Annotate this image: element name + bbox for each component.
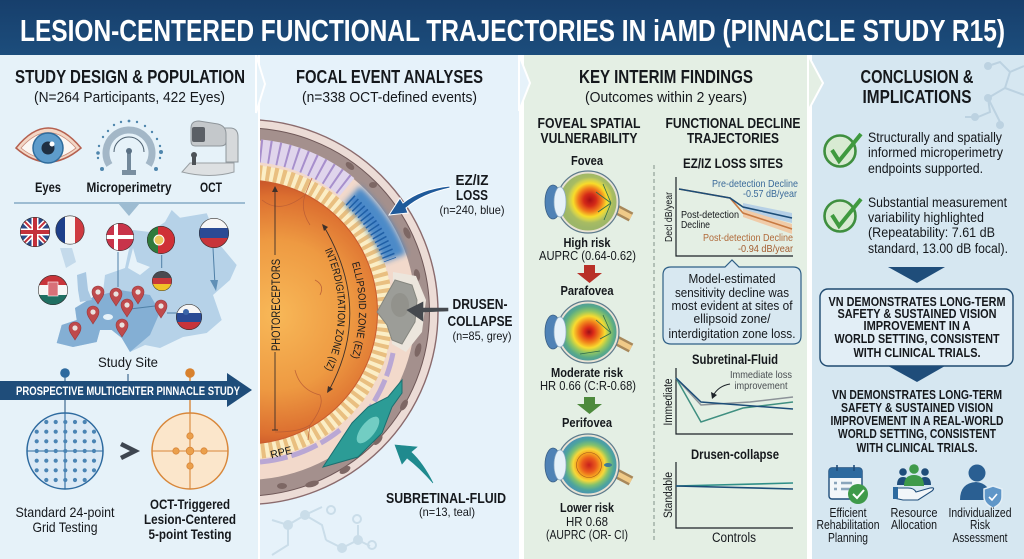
caption: lesion-centered testing bbox=[144, 496, 236, 542]
caption: risk assessment bbox=[948, 506, 1012, 545]
caption: rehabilitation planning: Efficient bbox=[830, 506, 867, 520]
line chart: EZ/IZ bbox=[663, 177, 798, 256]
subheading: foveal: FOVEAL SPATIAL bbox=[538, 116, 641, 132]
text: measurement variability: variability highlighted bbox=[868, 210, 984, 225]
heading: focal events bbox=[296, 67, 483, 106]
heading: study design: STUDY DESIGN & POPULATION bbox=[15, 67, 245, 87]
callout: model-estimated decline bbox=[663, 260, 801, 344]
chart: standard 24-point grid bbox=[27, 413, 103, 489]
arrow: down two bbox=[888, 366, 945, 382]
arrow: down red bbox=[577, 265, 602, 283]
flag: Slovenia bbox=[176, 304, 202, 330]
caption: resource allocation: Allocation bbox=[891, 518, 937, 532]
heading: key findings bbox=[579, 67, 753, 106]
risk: lower: (AUPRC (OR- CI) bbox=[546, 528, 628, 542]
text: measurement variability bbox=[868, 195, 1008, 256]
callout: VN demonstrates: WITH CLINICAL TRIALS. bbox=[854, 346, 980, 360]
EZ/IZ loss region bbox=[350, 195, 395, 260]
caption: resource allocation: Resource bbox=[890, 506, 938, 520]
arrow: down one bbox=[888, 267, 945, 283]
panel: study design and population bbox=[0, 67, 252, 542]
icon labels: OCT bbox=[200, 180, 223, 195]
icon labels: Microperimetry bbox=[86, 180, 172, 195]
line chart: EZ/IZ: -0.94 dB/year bbox=[738, 243, 793, 255]
text: measurement variability: Substantial measurement bbox=[868, 195, 1007, 210]
callout: model-estimated decline: Model-estimated bbox=[688, 272, 776, 286]
label: subretinal fluid: (n=13, teal) bbox=[419, 505, 475, 519]
line chart: EZ/IZ: Post-detection Decline bbox=[703, 232, 793, 244]
chart heading: EZ/IZ loss sites: EZ/IZ LOSS SITES bbox=[683, 155, 783, 171]
heading: focal events: FOCAL EVENT ANALYSES bbox=[296, 67, 483, 87]
risk: moderate: HR 0.66 (C:R-0.68) bbox=[540, 379, 636, 393]
arrow: EZ/IZ bbox=[389, 186, 450, 215]
caption: risk assessment: Assessment bbox=[952, 531, 1008, 545]
eye heatmap: parafovea bbox=[545, 301, 631, 363]
column: functional decline trajectories bbox=[663, 116, 801, 545]
chart: lesion-centered 5-point test bbox=[152, 413, 228, 489]
icon: risk assessment person with shield bbox=[960, 464, 1002, 508]
line chart: EZ/IZ: Decline bbox=[681, 219, 710, 231]
retinal vessels bbox=[262, 178, 322, 440]
heading: key findings: (Outcomes within 2 years) bbox=[585, 90, 747, 106]
callout: VN demonstrates: WORLD SETTING, CONSISTENT bbox=[834, 332, 1000, 346]
label: drusen collapse: (n=85, grey) bbox=[452, 329, 512, 343]
curved zone labels bbox=[322, 224, 366, 393]
subheading: functional decline: TRAJECTORIES bbox=[687, 131, 779, 147]
risk: moderate: Moderate risk bbox=[551, 365, 624, 380]
icon labels: Eyes bbox=[35, 180, 61, 195]
line chart: drusen collapse bbox=[663, 462, 793, 545]
greater-than symbol bbox=[121, 444, 135, 458]
sclera outer rim bbox=[260, 119, 439, 505]
text: measurement variability: standard, 13.00 dB focal). bbox=[868, 241, 1008, 256]
map of Europe with study sites bbox=[57, 210, 237, 352]
flag: Portugal bbox=[147, 226, 175, 254]
risk: moderate bbox=[540, 365, 636, 393]
line chart: subretinal fluid bbox=[663, 368, 793, 434]
diagram: retina cross-section bbox=[260, 119, 439, 505]
risk: high bbox=[539, 235, 636, 263]
callout: model-estimated decline: ellipsoid zone/ bbox=[694, 312, 771, 326]
drusen collapse deposit bbox=[377, 272, 426, 352]
caption: risk assessment: Individualized bbox=[948, 506, 1012, 520]
heading: conclusion: CONCLUSION & bbox=[860, 67, 974, 87]
line chart: EZ/IZ: -0.57 dB/year bbox=[743, 188, 797, 200]
line chart: EZ/IZ: Pre-detection Decline bbox=[712, 178, 798, 190]
title banner bbox=[0, 0, 1024, 55]
label: perifovea: Perifovea bbox=[562, 415, 613, 430]
icon: check two bbox=[824, 199, 861, 232]
icon: microperimetry bbox=[96, 120, 163, 175]
panel: focal event analyses bbox=[260, 67, 513, 556]
heading: study design bbox=[15, 67, 245, 106]
callout: model-estimated decline: sensitivity decline was bbox=[675, 286, 789, 300]
label: fovea: Fovea bbox=[571, 153, 604, 168]
icon: rehabilitation calendar bbox=[829, 465, 868, 504]
panel: conclusion and implications bbox=[816, 62, 1024, 545]
RPE label: RPE bbox=[269, 445, 293, 462]
heading: conclusion: IMPLICATIONS bbox=[862, 87, 972, 107]
timeline arrow banner bbox=[0, 368, 252, 430]
caption: lesion-centered testing: Lesion-Centered bbox=[144, 511, 236, 527]
flag: Denmark bbox=[106, 223, 134, 251]
flag: United Kingdom bbox=[20, 217, 50, 247]
callout: VN demonstrates: SAFETY & SUSTAINED VISION bbox=[838, 307, 996, 321]
label: drusen collapse bbox=[448, 297, 513, 343]
flag: Germany bbox=[152, 271, 172, 291]
photoreceptors axis label bbox=[272, 186, 280, 430]
caption: rehabilitation planning: Rehabilitation bbox=[816, 518, 880, 532]
icon: check one bbox=[824, 134, 861, 166]
text: VN demonstrates real-world: SAFETY & SUSTAINED VISION bbox=[841, 401, 993, 415]
text: measurement variability: (Repeatability: 7.61 dB bbox=[868, 225, 995, 240]
icon: eye bbox=[16, 128, 81, 163]
risk: high: High risk bbox=[564, 235, 611, 250]
line chart: EZ/IZ: Post-detection bbox=[681, 209, 739, 221]
line chart: subretinal fluid: improvement bbox=[734, 380, 788, 392]
pale subretinal band bbox=[260, 140, 412, 480]
text: endpoints supported bbox=[868, 130, 1003, 176]
photoreceptor outer segments bbox=[260, 151, 393, 462]
label: EZ/IZ loss bbox=[440, 173, 504, 217]
line chart: subretinal fluid: Immediate bbox=[663, 378, 675, 426]
subheading: foveal: VULNERABILITY bbox=[540, 131, 638, 147]
callout: model-estimated decline: most evident at sites of bbox=[672, 299, 793, 313]
chart heading: drusen collapse: Drusen-collapse bbox=[691, 447, 779, 462]
label: EZ/IZ loss: LOSS bbox=[456, 188, 488, 204]
arrow: down green bbox=[577, 397, 602, 414]
orange retina bbox=[260, 180, 378, 444]
callout: VN demonstrates bbox=[820, 289, 1013, 366]
flag: Russia bbox=[199, 218, 229, 248]
caption: standard testing bbox=[16, 504, 115, 535]
chart heading: subretinal fluid: Subretinal-Fluid bbox=[692, 352, 778, 367]
caption: lesion-centered testing: 5-point Testing bbox=[148, 526, 232, 542]
label: subretinal fluid: SUBRETINAL-FLUID bbox=[386, 491, 506, 507]
decorative molecule bbox=[965, 62, 1024, 128]
arrow: drusen bbox=[407, 302, 448, 321]
text: endpoints supported: informed microperimetry bbox=[868, 145, 1003, 160]
heading: study design: (N=264 Participants, 422 Eyes) bbox=[34, 90, 225, 106]
curved zone labels: ELLIPSOID ZONE (EZ) bbox=[350, 262, 366, 358]
caption: risk assessment: Risk bbox=[970, 518, 991, 532]
panel: key interim findings bbox=[538, 67, 801, 545]
label: drusen collapse: DRUSEN- bbox=[452, 297, 508, 313]
caption: standard testing: Grid Testing bbox=[32, 519, 98, 535]
photoreceptors axis label: PHOTORECEPTORS bbox=[271, 259, 283, 351]
map label: study site: Study Site bbox=[98, 354, 158, 370]
curved zone labels: INTERDIGITATION ZONE (IZ) bbox=[324, 248, 346, 371]
line chart: EZ/IZ: Decl dB/year bbox=[663, 192, 675, 242]
icon: resource allocation bbox=[893, 464, 934, 500]
icon labels bbox=[35, 180, 223, 195]
choroid layer bbox=[260, 128, 430, 496]
caption: rehabilitation planning: Planning bbox=[828, 531, 868, 545]
risk: lower: Lower risk bbox=[560, 500, 615, 515]
flag: France bbox=[55, 215, 85, 245]
line chart: drusen collapse: Controls bbox=[712, 530, 756, 545]
callout: VN demonstrates: IMPROVEMENT IN A bbox=[864, 319, 970, 333]
caption: lesion-centered testing: OCT-Triggered bbox=[150, 496, 230, 512]
caption: resource allocation bbox=[890, 506, 938, 532]
subheading: functional decline bbox=[666, 116, 801, 147]
line chart: drusen collapse: Standable bbox=[663, 472, 675, 518]
subheading: foveal bbox=[538, 116, 641, 147]
timeline arrow banner: PROSPECTIVE MULTICENTER PINNACLE STUDY bbox=[16, 386, 240, 398]
label: drusen collapse: COLLAPSE bbox=[448, 314, 513, 330]
subheading: functional decline: FUNCTIONAL DECLINE bbox=[666, 116, 801, 132]
label: EZ/IZ loss: EZ/IZ bbox=[456, 173, 489, 189]
text: endpoints supported: Structurally and spatially bbox=[868, 130, 1002, 145]
map pins bbox=[69, 286, 167, 340]
risk: high: AUPRC (0.64-0.62) bbox=[539, 249, 636, 263]
risk: lower: HR 0.68 bbox=[566, 515, 608, 529]
flag: Croatia bbox=[38, 275, 68, 305]
arrow: subretinal fluid bbox=[395, 445, 433, 483]
label: parafovea: Parafovea bbox=[560, 283, 614, 298]
eye heatmap: perifovea bbox=[545, 434, 631, 496]
label: EZ/IZ loss: (n=240, blue) bbox=[440, 203, 504, 217]
callout: model-estimated decline: interdigitation zone loss. bbox=[668, 327, 796, 341]
text: VN demonstrates real-world: WITH CLINICAL TRIALS. bbox=[856, 441, 978, 455]
heading: key findings: KEY INTERIM FINDINGS bbox=[579, 67, 753, 87]
yellow photoreceptor stripes bbox=[260, 165, 391, 459]
decorative molecule bbox=[272, 506, 376, 555]
column: foveal spatial vulnerability bbox=[538, 116, 641, 542]
line chart: subretinal fluid: Immediate loss bbox=[730, 369, 792, 381]
icon: OCT device bbox=[182, 121, 238, 176]
text: endpoints supported: endpoints supported. bbox=[868, 161, 983, 176]
heading: conclusion bbox=[860, 67, 974, 107]
risk: lower bbox=[546, 500, 628, 542]
caption: rehabilitation planning bbox=[816, 506, 880, 545]
eye heatmap: fovea bbox=[545, 171, 631, 233]
caption: standard testing: Standard 24-point bbox=[16, 504, 115, 520]
text: VN demonstrates real-world bbox=[830, 388, 1004, 455]
subretinal fluid pocket bbox=[323, 380, 402, 467]
label: subretinal fluid bbox=[386, 491, 506, 519]
heading: focal events: (n=338 OCT-defined events) bbox=[302, 90, 477, 106]
